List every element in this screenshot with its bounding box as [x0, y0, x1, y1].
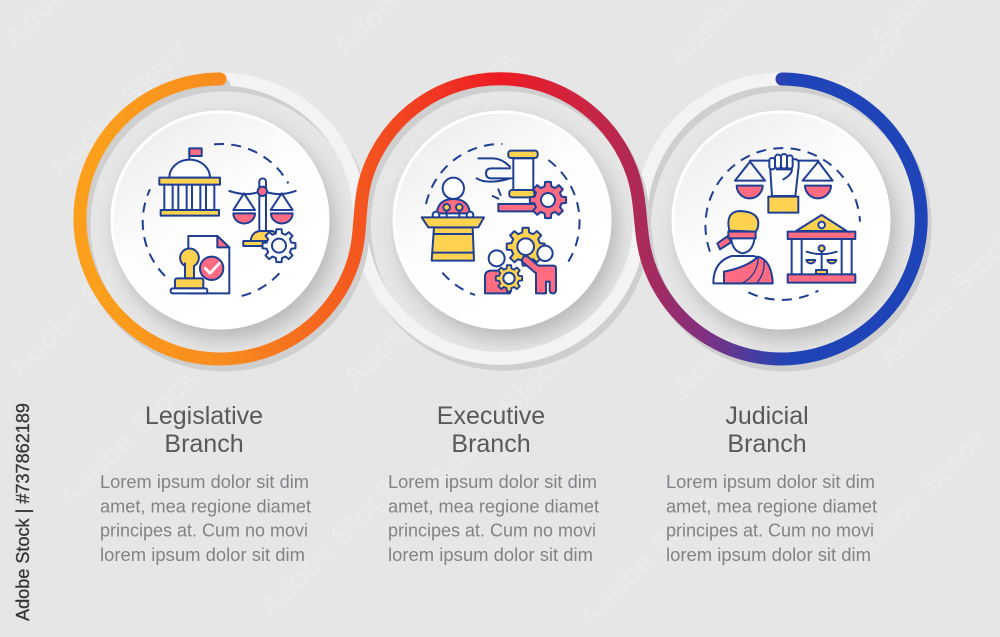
text block: executive: principes at. Cum no movi — [388, 520, 596, 540]
text block: legislative: Lorem ipsum dolor sit dim — [100, 472, 309, 492]
text block: executive — [388, 472, 599, 565]
text block: judicial: principes at. Cum no movi — [666, 520, 874, 540]
stock id label: Adobe Stock | #737862189 — [13, 403, 33, 621]
heading: Legislative Branch: Legislative — [145, 402, 263, 430]
icon: executive branch — [422, 144, 580, 295]
light ring track — [220, 79, 785, 364]
panel: judicial disk — [673, 112, 889, 328]
icon: legislative branch — [143, 144, 296, 296]
text block: judicial: lorem ipsum dolor sit dim — [666, 545, 871, 565]
text: Adobe Stock — [372, 42, 525, 195]
panel: executive disk — [394, 112, 610, 328]
text: Adobe Stock — [572, 482, 725, 635]
text block: judicial: Lorem ipsum dolor sit dim — [666, 472, 875, 492]
text: Adobe Stock — [842, 422, 995, 575]
panel: legislative disk — [112, 112, 328, 328]
text: Adobe Stock — [252, 472, 405, 625]
heading: Judicial Branch: Branch — [727, 430, 807, 458]
heading: Executive Branch: Branch — [451, 430, 531, 458]
text block: executive: amet, mea regione diamet — [388, 496, 599, 516]
text block: executive: lorem ipsum dolor sit dim — [388, 545, 593, 565]
heading: Executive Branch: Executive — [437, 402, 545, 430]
text block: judicial — [666, 472, 877, 565]
text: Adobe Stock — [667, 252, 820, 405]
coloured flowing ring — [80, 79, 925, 365]
text: Adobe Stock — [762, 22, 915, 175]
text: Adobe Stock — [42, 32, 195, 185]
text block: legislative: principes at. Cum no movi — [100, 520, 308, 540]
heading: Judicial Branch: Judicial — [725, 402, 809, 430]
text: Adobe Stock — [422, 342, 575, 495]
text block: executive: Lorem ipsum dolor sit dim — [388, 472, 597, 492]
text block: judicial: amet, mea regione diamet — [666, 496, 877, 516]
heading: Legislative Branch: Branch — [164, 430, 244, 458]
text: Adobe Stock — [337, 242, 490, 395]
text: Adobe Stock — [2, 232, 155, 385]
text block: legislative: amet, mea regione diamet — [100, 496, 311, 516]
text block: legislative: lorem ipsum dolor sit dim — [100, 545, 305, 565]
icon: judicial branch — [705, 148, 860, 300]
text block: legislative — [100, 472, 311, 565]
text: Adobe Stock — [52, 362, 205, 515]
